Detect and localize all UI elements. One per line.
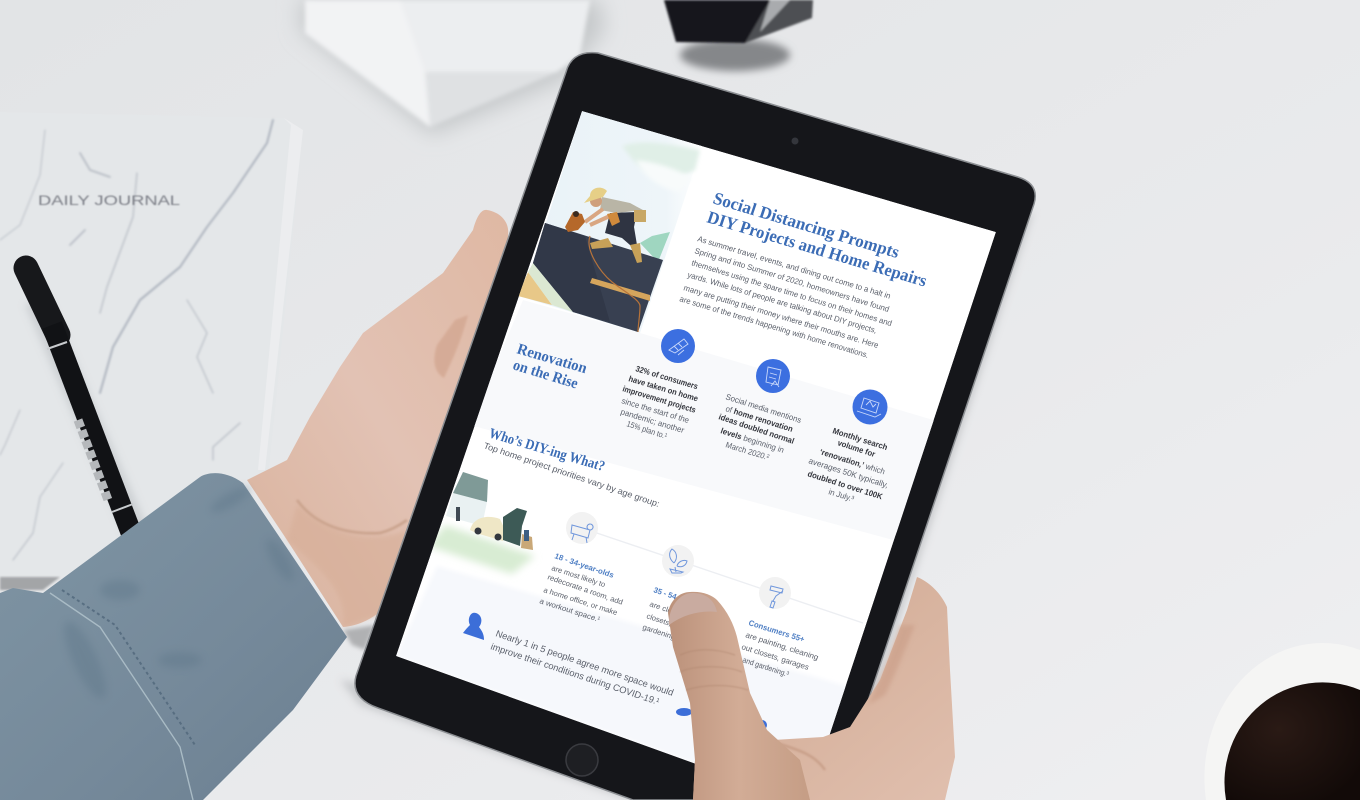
home button bbox=[566, 744, 598, 776]
stat 1 text: pandemic; another bbox=[619, 407, 686, 435]
person bbox=[456, 507, 460, 521]
age group 55+: Consumers 55+ bbox=[747, 618, 806, 644]
stat 2 text: Social media mentions bbox=[724, 392, 803, 425]
pouch bbox=[607, 212, 620, 226]
timeline line bbox=[582, 528, 863, 623]
age group 18-34: a home office, or make bbox=[542, 585, 619, 617]
nail gun bbox=[565, 212, 585, 232]
car boot bbox=[503, 508, 527, 546]
legs bbox=[605, 212, 637, 246]
next section icons peeking out bbox=[676, 708, 767, 730]
tablet body bbox=[355, 53, 1035, 800]
band: renovation on the rise bbox=[474, 362, 934, 535]
intro text: many are putting their money where their mouths are. Here bbox=[682, 283, 880, 350]
callout: nearly 1 in 5: improve their conditions during COVID-19.¹ bbox=[489, 641, 661, 707]
band: nearly 1 in 5 bbox=[396, 570, 846, 764]
illustration: roofer bbox=[518, 111, 702, 333]
left hand bbox=[247, 210, 508, 627]
tree bbox=[640, 232, 670, 262]
age group 18-34: are most likely to bbox=[550, 563, 607, 589]
fascia stripes bbox=[528, 263, 573, 312]
stat 1 bbox=[619, 329, 700, 441]
age group 18-34: redecorate a room, add bbox=[546, 572, 624, 607]
stat 1 text: since the start of the bbox=[620, 396, 691, 425]
icon: tool bbox=[661, 329, 695, 363]
plank bbox=[590, 278, 650, 301]
dark object bbox=[664, 0, 813, 71]
intro text: themselves using the spare time to focus on their homes and bbox=[690, 258, 893, 328]
garage wall bbox=[446, 493, 487, 526]
thumb nail bbox=[669, 593, 717, 625]
notebook label: DAILY JOURNAL bbox=[38, 192, 180, 208]
age group 35-54 bbox=[641, 585, 713, 642]
stat 3 bbox=[806, 390, 889, 504]
right hand bbox=[668, 577, 955, 800]
stat 2 text: March 2020.² bbox=[724, 440, 771, 462]
stat 2 bbox=[717, 359, 803, 462]
hand shadow on desk bbox=[343, 625, 375, 650]
illustration: house and car bbox=[428, 472, 535, 574]
front camera bbox=[792, 138, 798, 144]
heading: renovation on the rise: Renovation bbox=[515, 341, 590, 377]
knee pad bbox=[634, 210, 646, 222]
white geometric object bbox=[300, 0, 605, 135]
heading: who's diy-ing what: Who’s DIY-ing What? bbox=[487, 426, 607, 475]
garage roof bbox=[453, 472, 488, 502]
boots bbox=[590, 238, 613, 249]
hard hat bbox=[584, 188, 607, 203]
age group 35-54: closets, garages bbox=[645, 611, 701, 637]
title: Social Distancing Prompts bbox=[711, 188, 902, 262]
denim sleeve bbox=[0, 473, 347, 800]
intro text: are some of the trends happening with home renovations. bbox=[678, 294, 870, 360]
screen: infographic bbox=[396, 111, 996, 800]
stat 1 text: 15% plan to.¹ bbox=[625, 419, 669, 441]
arm bbox=[585, 209, 612, 225]
sky bbox=[522, 111, 702, 333]
cord bbox=[589, 236, 640, 332]
screen background bbox=[396, 111, 996, 800]
sleeve seam bbox=[50, 593, 193, 800]
thumb bbox=[668, 592, 810, 800]
callout: nearly 1 in 5: Nearly 1 in 5 people agree more space would bbox=[494, 628, 675, 698]
intro text: yards. While lots of people are talking about DIY projects, bbox=[686, 270, 878, 335]
head bbox=[590, 198, 602, 207]
stat 1 text: have taken on home bbox=[627, 374, 700, 403]
stat 2 text: ideas doubled normal bbox=[717, 412, 795, 446]
icon: laptop chart bbox=[852, 390, 888, 424]
moving boxes and person bbox=[521, 534, 533, 550]
intro text bbox=[678, 234, 893, 360]
roof bbox=[533, 223, 663, 332]
pen bbox=[26, 268, 140, 540]
stat 3 text: volume for bbox=[836, 438, 877, 459]
stat 2 text bbox=[717, 392, 803, 462]
palm and fingers bbox=[693, 577, 955, 800]
stat 2 text: levels beginning in bbox=[719, 426, 786, 455]
age group 35-54: 35 - 54-year-olds bbox=[652, 585, 713, 613]
worker bbox=[565, 188, 646, 263]
age group 35-54: are cleaning out bbox=[648, 599, 705, 626]
icon: person bbox=[463, 613, 484, 640]
left arm and hand bbox=[0, 210, 508, 800]
stat 3 text: averages 50K typically, bbox=[807, 456, 889, 490]
heading: renovation on the rise bbox=[513, 344, 586, 388]
age group 18-34: a workout space.¹ bbox=[538, 596, 602, 624]
stat 3 text: ‘renovation,’ which bbox=[818, 447, 887, 476]
stat 3 text: Monthly search bbox=[831, 426, 889, 452]
title: DIY Projects and Home Repairs bbox=[705, 207, 930, 291]
clouds bbox=[624, 142, 700, 174]
torso bbox=[600, 197, 643, 213]
marble notebook bbox=[0, 112, 303, 590]
stat 3 text bbox=[806, 426, 889, 504]
subheading: Top home project priorities vary by age group: bbox=[482, 441, 661, 509]
car bbox=[470, 517, 505, 541]
heading: renovation on the rise: on the Rise bbox=[511, 357, 580, 392]
age group 18-34 bbox=[538, 551, 624, 624]
stat 1 text: 32% of consumers bbox=[634, 364, 699, 391]
age group 55+: out closets, garages bbox=[740, 642, 810, 672]
stat 3 text: doubled to over 100K bbox=[806, 469, 884, 501]
age group 55+: are painting, cleaning bbox=[744, 630, 820, 662]
stat 1 text bbox=[619, 364, 700, 441]
icon: paint roller bbox=[759, 577, 791, 609]
age group 35-54: gardening. bbox=[641, 622, 679, 642]
icon: plant bbox=[662, 545, 694, 577]
wood trim bbox=[518, 272, 552, 305]
stat 2 text: of home renovation bbox=[724, 404, 794, 434]
age group 55+ bbox=[740, 618, 820, 679]
stat 3 text: in July.³ bbox=[827, 487, 855, 504]
icon: desk bbox=[566, 512, 598, 544]
lawn bbox=[428, 525, 535, 574]
tablet bbox=[340, 53, 1035, 800]
stat 1 text: improvement projects bbox=[621, 384, 697, 415]
age group 18-34: 18 - 34-year-olds bbox=[553, 551, 616, 580]
intro text: As summer travel, events, and dining out come to a halt in bbox=[696, 234, 892, 301]
intro text: Spring and into Summer of 2020, homeowners have found bbox=[693, 246, 891, 314]
coffee cup bbox=[1204, 643, 1360, 800]
icon: phone bbox=[756, 359, 790, 393]
age group 55+: and gardening.³ bbox=[741, 655, 790, 679]
